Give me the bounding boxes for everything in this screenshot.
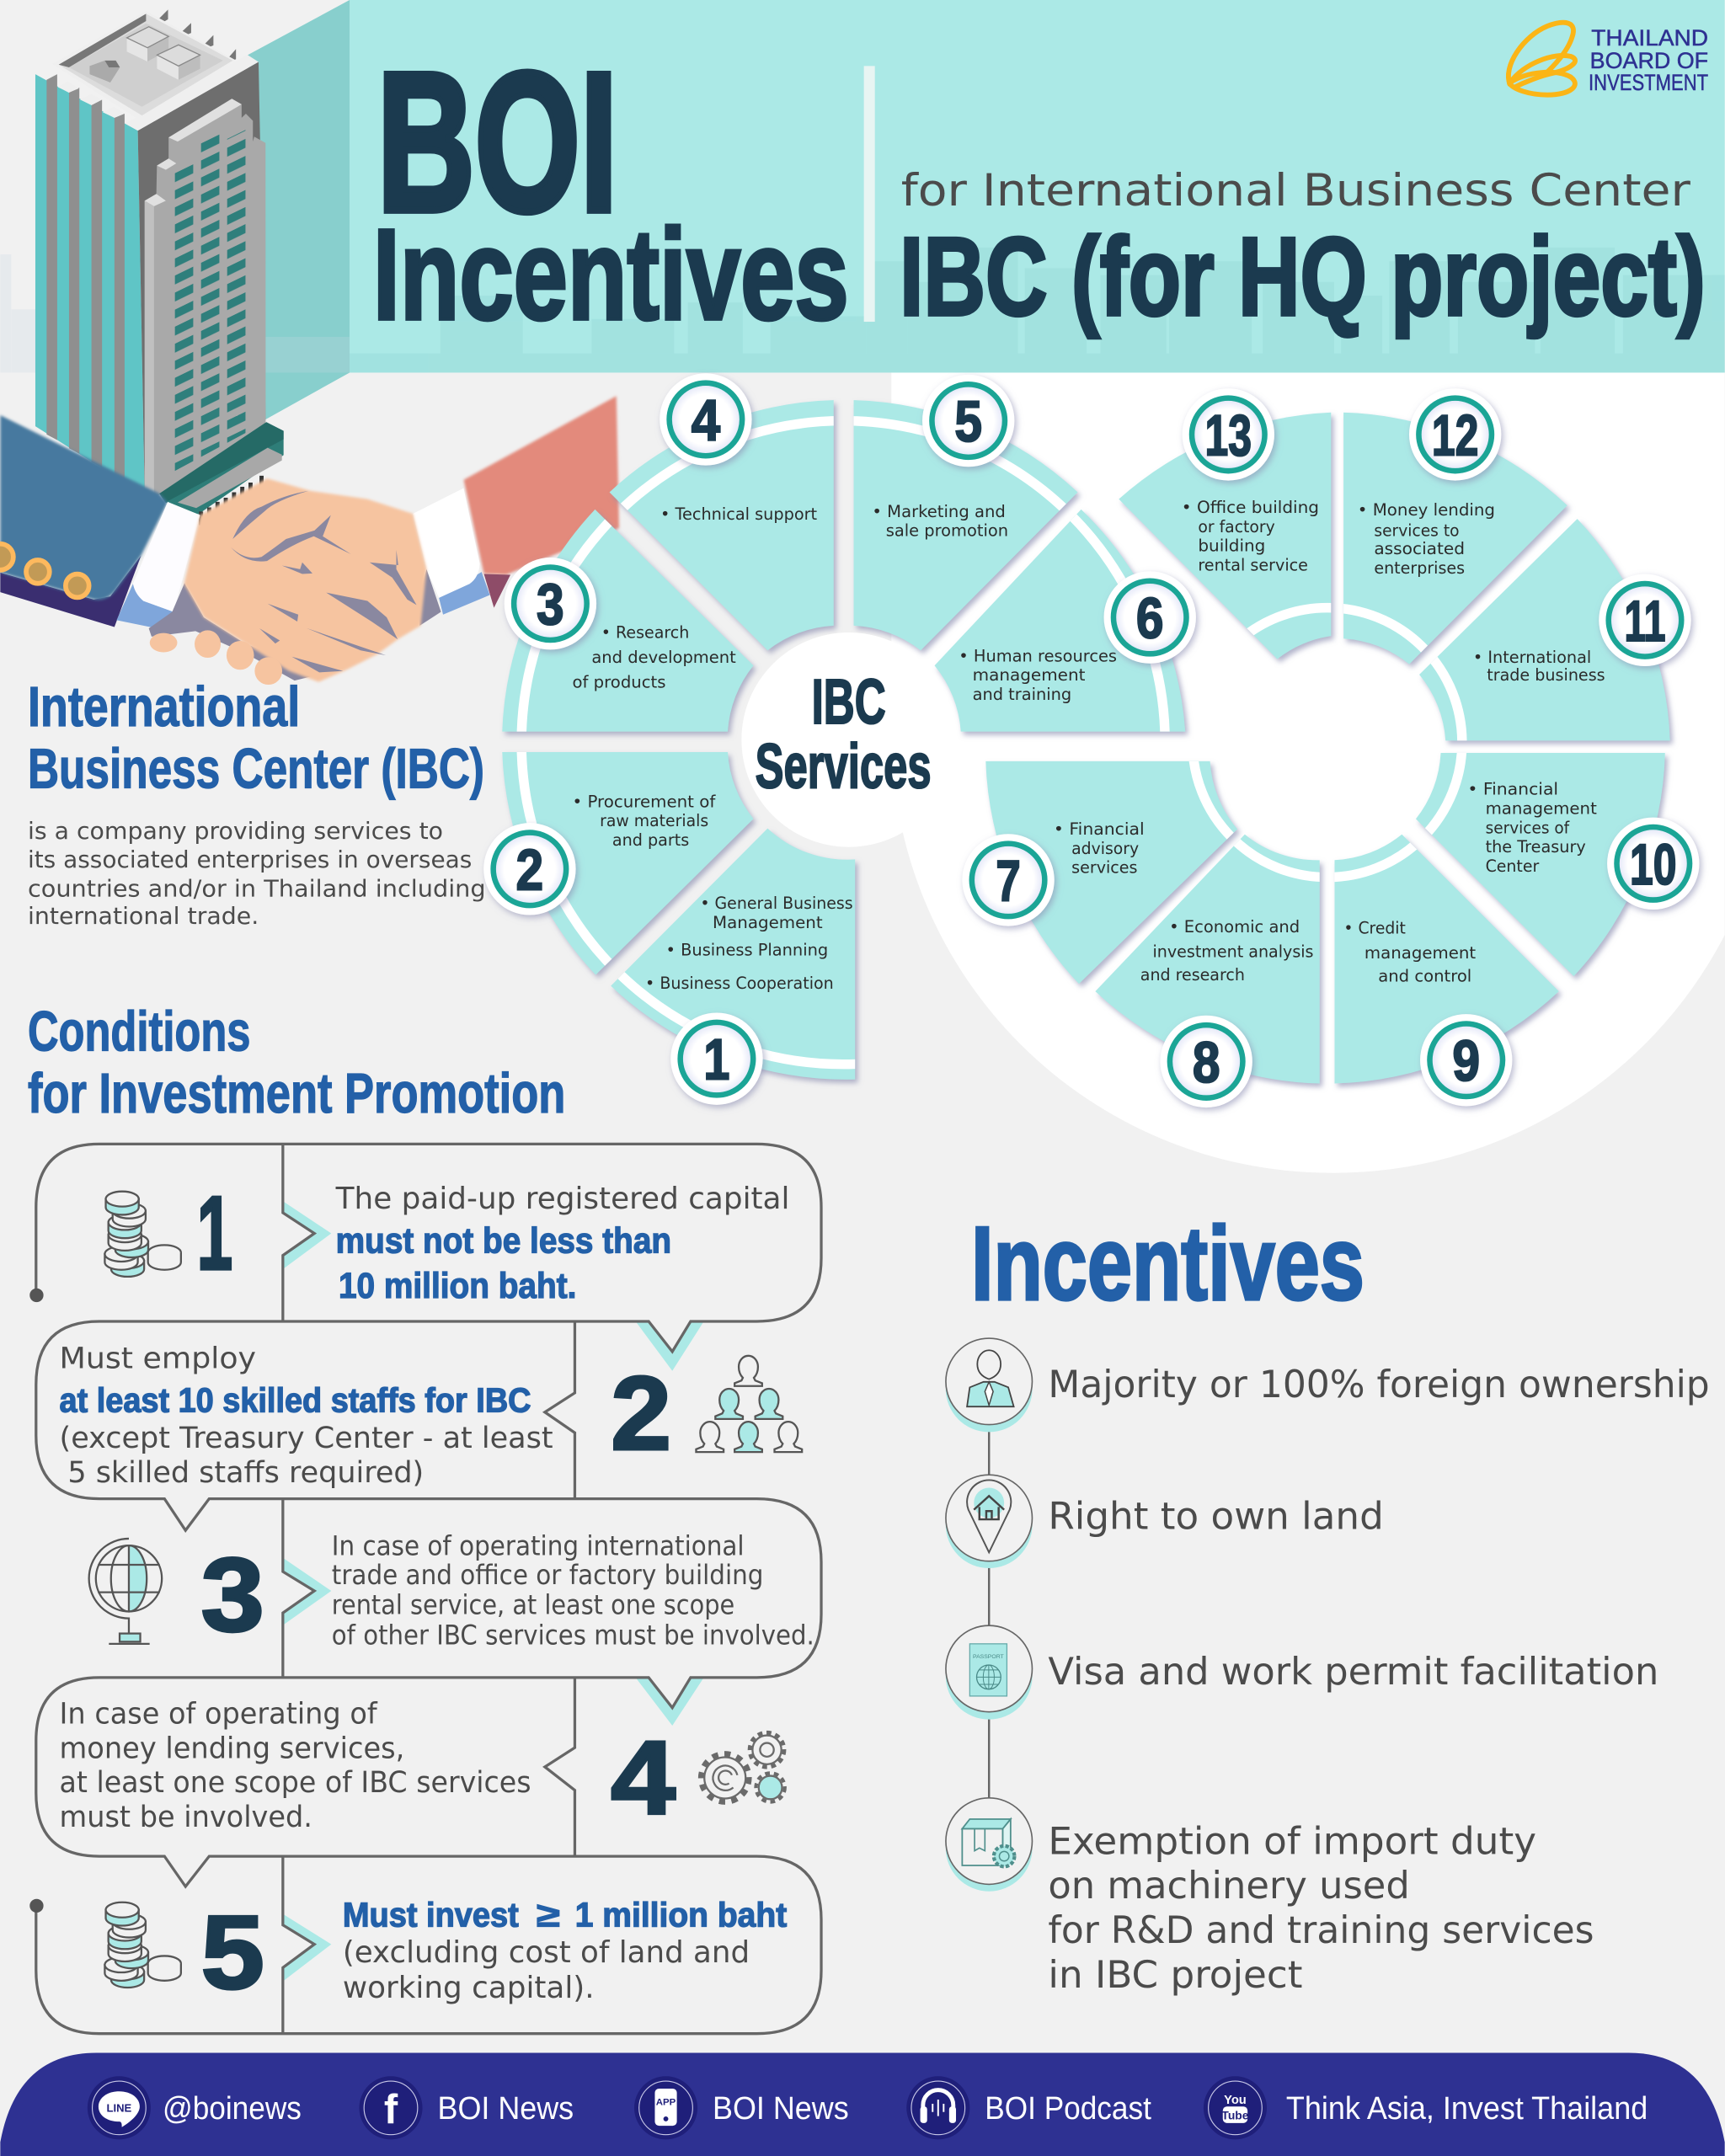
- text block: IBC definition: [28, 817, 486, 930]
- badge 9: [1420, 1014, 1512, 1106]
- sleeve buttons: [0, 544, 13, 570]
- logo wordmark: BOARD OF: [1590, 48, 1708, 73]
- badge 8: 8: [1193, 1030, 1220, 1095]
- hub label: IBC Services: Services: [756, 731, 932, 802]
- service labels: • Economic and: [1169, 917, 1300, 937]
- condition 3: In case of operating international: [332, 1530, 745, 1562]
- YouTube link: You: [1224, 2094, 1247, 2107]
- badge 9: 9: [1452, 1028, 1480, 1093]
- incentive 4: Exemption of import duty: [1048, 1821, 1536, 1864]
- condition 4: at least one scope of IBC services: [60, 1766, 531, 1800]
- left cuff: [133, 502, 200, 612]
- badge 13: 13: [1205, 403, 1252, 467]
- condition 5: [104, 1895, 788, 2011]
- incentive 2: Right to own land: [1048, 1496, 1384, 1539]
- service labels: • Money lending: [1358, 500, 1495, 520]
- badge 3: 3: [537, 572, 564, 637]
- logo wordmark: [1589, 25, 1708, 95]
- wheel sectors: [502, 400, 1185, 1080]
- service labels: [573, 498, 1605, 993]
- condition 2: [60, 1342, 802, 1490]
- Podcast link: [906, 2076, 1151, 2139]
- tower podium: [159, 422, 284, 515]
- icon: coins: [104, 1192, 181, 1277]
- condition 3: of other IBC services must be involved.: [332, 1620, 814, 1652]
- YouTube link: Think Asia, Invest Thailand: [1286, 2090, 1648, 2126]
- condition 1: 1: [197, 1176, 232, 1292]
- Facebook link: [359, 2076, 574, 2139]
- incentive 1: [946, 1338, 1710, 1432]
- service labels: trade business: [1487, 665, 1605, 685]
- service labels: • Research: [601, 623, 689, 643]
- LINE link: [88, 2076, 302, 2139]
- incentive 4: for R&D and training services: [1048, 1909, 1594, 1952]
- incentive 3: Visa and work permit facilitation: [1048, 1651, 1658, 1694]
- condition 3: 3: [201, 1537, 264, 1653]
- butterfly mark: [1509, 23, 1575, 95]
- service labels: advisory: [1071, 839, 1139, 858]
- teal chevrons: [283, 1201, 704, 1982]
- tower facade: [145, 99, 265, 504]
- panel: conditions flow: [29, 1144, 821, 2034]
- condition 3: [89, 1530, 814, 1653]
- Facebook link: f: [384, 2087, 398, 2132]
- condition 3: rental service, at least one scope: [332, 1589, 734, 1621]
- incentive 2: [946, 1475, 1384, 1568]
- condition 4: money lending services,: [60, 1732, 404, 1765]
- condition 2: Must employ: [60, 1342, 256, 1375]
- condition 1: The paid-up registered capital: [335, 1182, 789, 1216]
- heading: Conditions for Investment Promotion: Conditions: [28, 1000, 250, 1063]
- LINE link: @boinews: [163, 2090, 302, 2126]
- badge 6: 6: [1136, 586, 1164, 651]
- icon: passport: [946, 1625, 1033, 1720]
- service labels: of products: [573, 672, 666, 691]
- badge 4: [660, 373, 752, 466]
- condition 1: [104, 1176, 789, 1305]
- service labels: building: [1198, 536, 1265, 556]
- badge 2: [483, 823, 576, 915]
- title: BOI Incentives: Incentives: [373, 202, 849, 347]
- service labels: and development: [591, 648, 736, 667]
- flow outline: [36, 1144, 821, 2034]
- service labels: • International: [1473, 648, 1591, 667]
- condition 1: 10 million baht.: [339, 1266, 576, 1305]
- left jacket lining: [0, 556, 142, 627]
- title: BOI Incentives: BOI: [377, 31, 617, 253]
- icon: home location pin: [946, 1475, 1033, 1568]
- service labels: • Financial: [1467, 780, 1558, 799]
- under hand: [149, 583, 322, 680]
- heading: International Business Center (IBC): International: [28, 675, 300, 739]
- badge 5: [922, 375, 1014, 467]
- hand creases: [231, 491, 417, 672]
- service labels: • Financial: [1054, 819, 1145, 839]
- incentive 1: Majority or 100% foreign ownership: [1048, 1364, 1710, 1406]
- condition 1: must not be less than: [336, 1220, 671, 1260]
- rooftop vents: [158, 9, 236, 61]
- incentive 3: [946, 1625, 1658, 1720]
- Podcast link: BOI Podcast: [985, 2090, 1151, 2126]
- badge 7: [962, 834, 1055, 926]
- text block: IBC definition: is a company providing services to: [28, 817, 443, 845]
- incentive 4: [946, 1798, 1594, 1997]
- timeline connectors: [988, 1426, 990, 1799]
- service labels: management: [1486, 799, 1597, 819]
- heading: International Business Center (IBC): [28, 675, 484, 801]
- service labels: and parts: [612, 830, 689, 850]
- tower left face: [35, 74, 145, 495]
- service labels: • Office building: [1182, 498, 1319, 517]
- condition 5: working capital).: [343, 1971, 595, 2005]
- badge 13: [1183, 388, 1274, 481]
- logo wordmark: THAILAND: [1591, 25, 1708, 51]
- header banner: [350, 0, 1725, 372]
- rooftop: [126, 55, 259, 131]
- condition 2: (except Treasury Center - at least: [60, 1422, 553, 1455]
- title: BOI Incentives: [373, 31, 849, 347]
- right cuff: [413, 488, 480, 598]
- badge 4: 4: [692, 387, 720, 452]
- hand: [184, 478, 426, 682]
- faint skyline on grey: [0, 254, 350, 372]
- centre hub: [741, 632, 956, 847]
- service labels: • Procurement of: [573, 792, 716, 811]
- incentive 4: in IBC project: [1048, 1954, 1302, 1997]
- icon: passport: PASSPORT: [973, 1654, 1005, 1660]
- icon: handshake: [0, 396, 619, 685]
- text block: IBC definition: its associated enterprises in overseas: [28, 846, 472, 873]
- logo: Thailand Board of Investment: [1509, 23, 1708, 95]
- badge 11: [1599, 574, 1691, 666]
- LINE link: LINE: [107, 2102, 132, 2115]
- condition 4: must be involved.: [60, 1801, 312, 1834]
- service labels: and research: [1140, 965, 1245, 985]
- badge 11: 11: [1624, 589, 1665, 654]
- service labels: services to: [1374, 521, 1460, 541]
- badge 3: [505, 558, 596, 649]
- tower right face: [138, 61, 265, 495]
- badge 10: 10: [1630, 832, 1677, 897]
- badge 2: 2: [516, 837, 543, 902]
- badge 10: [1607, 818, 1699, 910]
- panel: incentives list: [946, 1338, 1710, 1997]
- number badges: [483, 373, 1699, 1107]
- Facebook link: BOI News: [438, 2090, 574, 2126]
- service labels: and control: [1378, 967, 1471, 986]
- service labels: • Business Planning: [666, 941, 828, 960]
- service labels: rental service: [1198, 556, 1308, 575]
- wheel sectors: [985, 413, 1670, 1084]
- left sleeve: [0, 415, 168, 600]
- service labels: and training: [973, 685, 1071, 704]
- service labels: sale promotion: [886, 521, 1008, 541]
- incentive 4: on machinery used: [1048, 1865, 1410, 1908]
- building side wall: [248, 0, 350, 419]
- condition 5: (excluding cost of land and: [343, 1935, 750, 1970]
- service labels: enterprises: [1374, 558, 1465, 578]
- YouTube link: Tube: [1221, 2109, 1249, 2122]
- right sleeve: [464, 396, 619, 574]
- subtitle: for International Business Center: [901, 166, 1690, 216]
- badge 8: [1160, 1016, 1252, 1107]
- condition 2: 2: [611, 1356, 671, 1472]
- icon: businessman: [946, 1338, 1033, 1432]
- rooftop boxes: [127, 38, 147, 61]
- badge 1: [670, 1012, 763, 1105]
- condition 4: In case of operating of: [60, 1698, 378, 1732]
- service labels: management: [1365, 943, 1476, 963]
- service labels: or factory: [1198, 517, 1275, 536]
- service labels: investment analysis: [1152, 942, 1314, 961]
- condition 4: [60, 1698, 785, 1836]
- icon: globe: [89, 1539, 162, 1644]
- chart: right services wheel: [985, 413, 1670, 1084]
- service labels: services: [1071, 858, 1138, 878]
- badge 12: [1409, 388, 1501, 481]
- service labels: • Marketing and: [872, 502, 1006, 521]
- text block: IBC definition: international trade.: [28, 902, 259, 930]
- chart: left services wheel: [502, 400, 1185, 1080]
- icon: coins: [104, 1903, 181, 1988]
- condition 2: at least 10 skilled staffs for IBC: [60, 1381, 531, 1420]
- badge 12: 12: [1432, 403, 1478, 467]
- condition 5: 5: [201, 1895, 264, 2011]
- App link: BOI News: [713, 2090, 849, 2126]
- badge 5: 5: [954, 389, 982, 454]
- service labels: management: [973, 665, 1086, 685]
- heading: Conditions for Investment Promotion: for Investment Promotion: [28, 1062, 565, 1125]
- white backdrop for second services wheel: [891, 372, 1725, 1173]
- condition 4: 4: [611, 1720, 676, 1836]
- hub label: IBC Services: IBC: [812, 666, 886, 737]
- icon: machinery package: [946, 1798, 1033, 1892]
- footer: social links: [88, 2076, 1648, 2139]
- service labels: raw materials: [600, 811, 708, 830]
- icon: people: [696, 1356, 802, 1452]
- heading: International Business Center (IBC): Business Center (IBC): [28, 738, 484, 801]
- service labels: Center: [1486, 857, 1540, 876]
- condition 5: ≥: [537, 1895, 560, 1934]
- service labels: • Human resources: [959, 646, 1117, 665]
- icon: office tower: [35, 9, 284, 526]
- service labels: associated: [1374, 539, 1465, 558]
- heading: Incentives: Incentives: [971, 1206, 1365, 1322]
- badge 1: 1: [703, 1027, 729, 1092]
- service labels: • General Business: [700, 894, 853, 913]
- YouTube link: [1204, 2076, 1648, 2139]
- condition 3: trade and office or factory building: [332, 1559, 763, 1591]
- service labels: services of: [1486, 818, 1570, 837]
- App link: [634, 2076, 849, 2139]
- condition 5: Must invest: [343, 1895, 519, 1934]
- footer bar: [0, 2053, 1725, 2156]
- text block: IBC definition: countries and/or in Thailand including: [28, 874, 486, 902]
- title divider: [864, 66, 875, 322]
- service labels: • Credit: [1343, 919, 1406, 938]
- badge 6: [1104, 571, 1196, 664]
- service labels: the Treasury: [1486, 837, 1586, 857]
- hub label: IBC Services: [756, 666, 932, 802]
- condition 2: 5 skilled staffs required): [67, 1456, 424, 1490]
- service labels: • Technical support: [660, 504, 817, 524]
- condition 5: 1 million baht: [575, 1895, 788, 1934]
- service labels: • Business Cooperation: [645, 974, 834, 993]
- service labels: Management: [713, 913, 823, 932]
- icon: gears: [701, 1732, 785, 1802]
- badge 7: 7: [996, 848, 1021, 913]
- App link: APP: [656, 2098, 676, 2108]
- heading: Conditions for Investment Promotion: [28, 1000, 565, 1125]
- city skyline: [350, 248, 1725, 372]
- fingers: [150, 633, 177, 653]
